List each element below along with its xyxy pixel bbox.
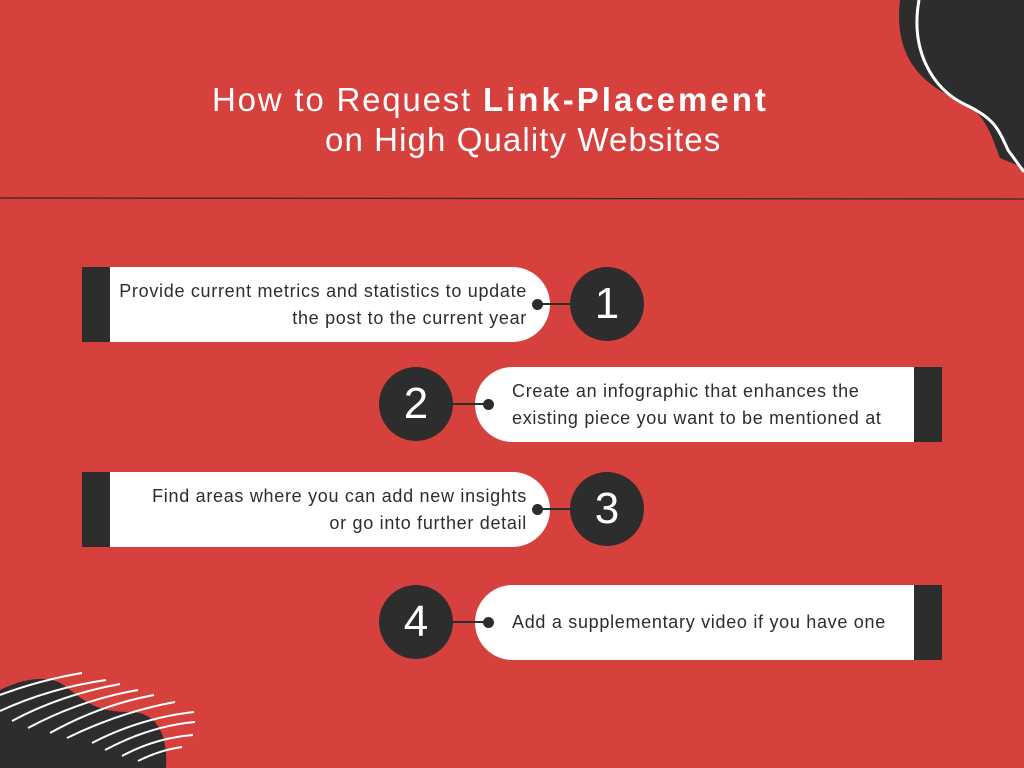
step 3 card	[82, 472, 550, 547]
title: How to Request Link-Placement	[212, 81, 769, 118]
step 3 card: or go into further detail	[329, 512, 527, 532]
step 1 card	[82, 267, 550, 342]
step 2 card: existing piece you want to be mentioned at	[512, 408, 882, 428]
step 1 number: 1	[595, 279, 619, 328]
step 2 number	[379, 367, 453, 441]
step 1 card: Provide current metrics and statistics to update	[119, 280, 527, 300]
step 1 number	[570, 267, 644, 341]
step 3 number	[570, 472, 644, 546]
step 3 card: Find areas where you can add new insights	[152, 486, 527, 506]
title: on High Quality Websites	[325, 121, 721, 158]
step 4 card: Add a supplementary video if you have one	[512, 612, 886, 632]
step 2 card	[475, 367, 942, 442]
step 2 number: 2	[404, 379, 428, 428]
step 4 card	[475, 585, 942, 660]
step 2 card: Create an infographic that enhances the	[512, 380, 860, 400]
step 3 number: 3	[595, 484, 619, 533]
step 1 card: the post to the current year	[292, 308, 527, 328]
step 4 number: 4	[404, 597, 428, 646]
title	[212, 81, 769, 158]
step 4 number	[379, 585, 453, 659]
